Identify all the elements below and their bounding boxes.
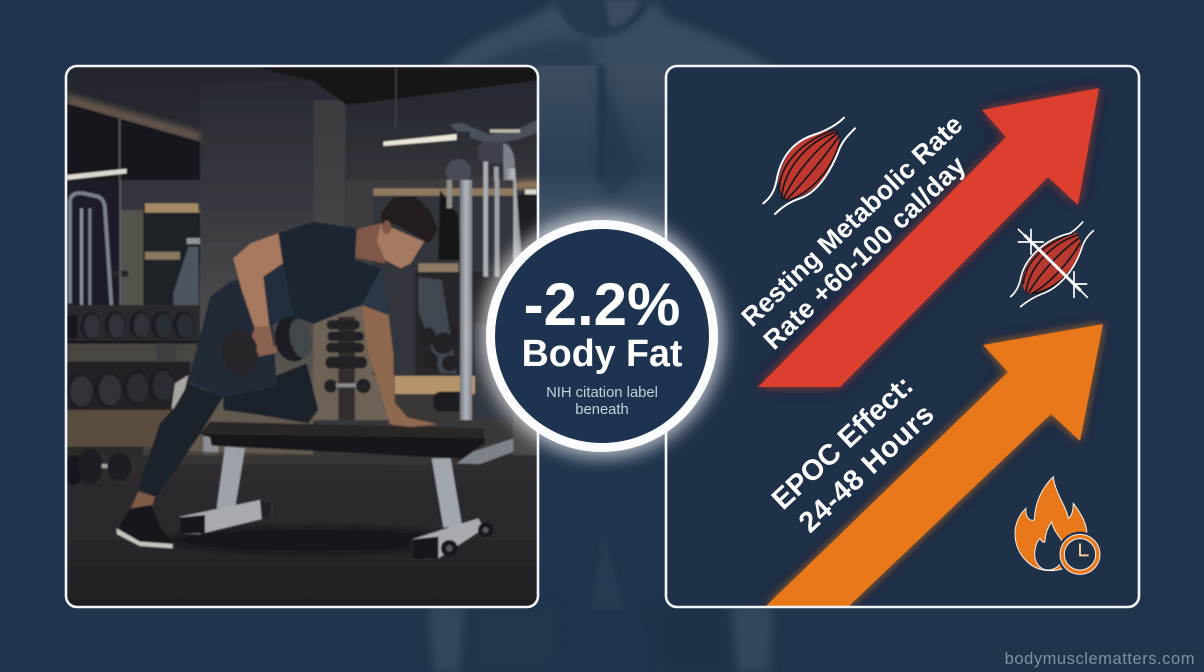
background muscular silhouette: [420, 0, 800, 672]
icon: muscle: [763, 118, 855, 214]
citation note: NIH citation label: [546, 385, 658, 401]
text: resting metabolic rate: Resting Metabolic Rate: [735, 109, 968, 332]
bench shadow: [170, 527, 457, 553]
lower dumbbell row: [67, 362, 190, 410]
floor dumbbell: [63, 448, 131, 485]
scene upper: ceiling, mirrors and lights: [67, 67, 540, 470]
cable machine top: [450, 120, 537, 142]
bench: [180, 422, 493, 559]
stat label: Body Fat: [522, 332, 683, 374]
icon: muscle with cross arrow: [1011, 222, 1093, 307]
upper dumbbell row: [67, 305, 200, 342]
scene lower: racks, floor, equipment: [60, 180, 540, 615]
icon: flame with clock: [1015, 477, 1103, 577]
arrow: resting metabolic rate: [758, 88, 1099, 387]
text: resting metabolic rate: Rate +60-100 cal/day: [757, 150, 972, 355]
panel: gym photo of dumbbell row: [60, 66, 540, 615]
stat value: -2.2%: [524, 271, 680, 338]
floor: [60, 455, 540, 615]
citation note: beneath: [575, 402, 629, 418]
watermark: bodymusclematters.com: [1005, 650, 1195, 668]
athlete: [117, 196, 438, 548]
panel: metabolic effects: [666, 66, 1139, 607]
text: EPOC effect: 24-48 Hours: [793, 398, 941, 539]
cabinet under the rack: [67, 410, 173, 447]
text: EPOC effect: EPOC Effect:: [766, 370, 920, 516]
arrow: EPOC effect: [766, 324, 1103, 606]
right wall: [347, 179, 514, 226]
callout: body fat stat: [481, 215, 723, 457]
panel border: photo: [66, 66, 538, 607]
tall dumbbell rack: [338, 317, 355, 420]
